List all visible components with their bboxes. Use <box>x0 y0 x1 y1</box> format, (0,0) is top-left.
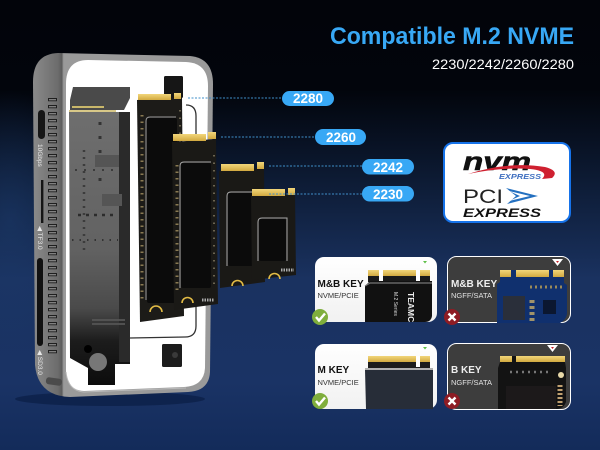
SSD image: TEAMC <box>406 292 416 322</box>
icon: cross 2 <box>444 393 460 409</box>
logo: NVM Express: nvm <box>463 148 531 176</box>
pill: 2230: 2230 <box>373 187 403 202</box>
SSD image <box>365 270 432 322</box>
pill: 2260 <box>315 129 366 145</box>
pill: 2280 <box>282 91 334 106</box>
pill: 2260: 2260 <box>326 130 356 145</box>
pin marker <box>423 261 427 264</box>
pin marker <box>552 259 563 266</box>
TF slot <box>41 180 43 223</box>
pin marker <box>547 345 558 352</box>
icon: check 1 <box>312 309 328 325</box>
logo: PCI Express: EXPRESS <box>463 206 541 220</box>
label: SD3.0: ◀ SD3.0 <box>36 350 43 375</box>
pin marker <box>423 347 427 350</box>
enclosure <box>33 53 213 397</box>
card: M&B KEY NVME/PCIE: NVME/PCIE <box>318 291 359 300</box>
SSD 2242 <box>219 162 265 288</box>
text: M&B KEY <box>451 279 497 290</box>
bottom chip <box>162 344 182 367</box>
card: M KEY NVME/PCIE: NVME/PCIE <box>318 378 359 387</box>
text: M KEY <box>318 365 350 376</box>
pill: 2230 <box>362 186 414 202</box>
SSD 2280 <box>137 93 184 322</box>
pill: 2242 <box>362 159 414 175</box>
SSD 2260 <box>172 132 218 310</box>
icon: cross 1 <box>444 309 460 325</box>
logo panel <box>444 143 570 222</box>
enclosure shell <box>33 53 213 397</box>
logo: NVM Express <box>463 148 555 181</box>
logo: PCI Express <box>463 187 541 220</box>
SSD 2230 <box>251 188 296 280</box>
text: M&B KEY <box>318 279 364 290</box>
translucent PCB <box>69 112 130 385</box>
card: M&B KEY NGFF/SATA: NGFF/SATA <box>451 291 492 300</box>
card: M KEY NVME/PCIE <box>315 344 437 409</box>
SSD image <box>497 270 567 323</box>
SSD image: M.2 Series <box>392 292 398 316</box>
title: Compatible M.2 NVME <box>330 23 574 50</box>
slot connector <box>70 87 130 110</box>
vents <box>48 98 57 354</box>
pill: 2280: 2280 <box>293 91 323 106</box>
pill: 2242: 2242 <box>373 160 403 175</box>
label: 10Gbps: 10Gbps <box>36 144 43 168</box>
card: M&B KEY NGFF/SATA <box>448 256 570 323</box>
top chip <box>164 76 183 98</box>
leader lines <box>188 98 362 194</box>
logo: NVM Express: EXPRESS <box>499 172 541 181</box>
inner cable line <box>130 105 196 338</box>
screw post <box>89 353 107 371</box>
label: TF3.0: ◀ TF3.0 <box>36 226 43 250</box>
bottom port <box>46 377 62 386</box>
USB-C port <box>38 110 45 139</box>
card: M&B KEY NVME/PCIE <box>315 257 437 322</box>
subtitle: 2230/2242/2260/2280 <box>432 57 574 72</box>
card: B KEY NGFF/SATA <box>448 344 570 410</box>
SSD image <box>498 356 566 409</box>
SD slot <box>37 258 43 346</box>
white interior <box>66 60 208 391</box>
icon: check 2 <box>312 393 328 409</box>
SSD image <box>365 356 433 409</box>
card: B KEY NGFF/SATA: NGFF/SATA <box>451 378 492 387</box>
logo: PCI Express: PCI <box>463 187 503 208</box>
text: B KEY <box>451 365 482 376</box>
